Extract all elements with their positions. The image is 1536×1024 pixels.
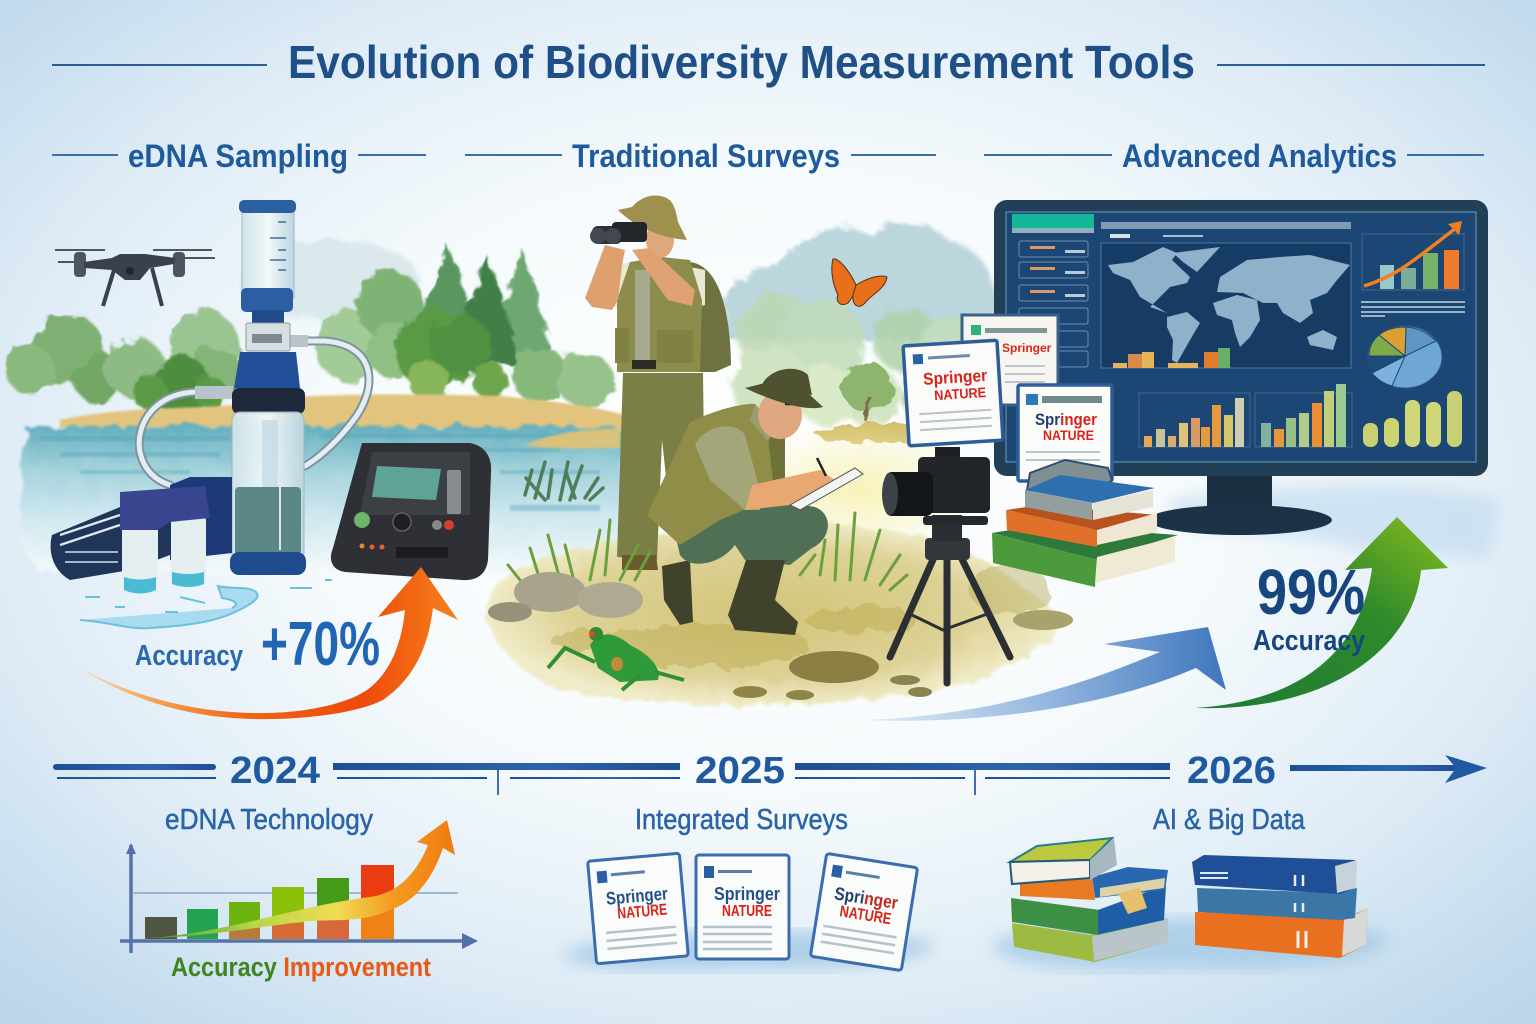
paper: Springer Nature 1: NATURE — [617, 901, 668, 923]
upper funnel — [242, 208, 294, 298]
title: Evolution of Biodiversity Measurement Tools — [288, 36, 1195, 88]
year 2025: 2025 — [695, 750, 785, 792]
label: 99% accuracy: Accuracy — [1253, 625, 1365, 657]
monitor — [994, 200, 1488, 535]
world map — [1101, 243, 1351, 368]
bar chart: accuracy improvement — [120, 820, 478, 953]
paper: front left report — [903, 340, 1003, 446]
label: eDNA Technology: eDNA Technology — [165, 804, 373, 836]
paper: Springer Nature 3 — [810, 853, 918, 971]
monitor frame — [994, 200, 1488, 476]
paper: Springer Nature 1: Springer — [605, 883, 669, 909]
arrow: green accuracy arrow — [1195, 517, 1448, 708]
right tree line — [732, 292, 980, 445]
grass tufts — [508, 513, 907, 590]
figure: crouching surveyor taking notes — [647, 369, 863, 635]
monitor stand — [1207, 474, 1272, 512]
paper: Springer Nature 2: Springer — [714, 884, 780, 904]
books: left stack — [1010, 838, 1168, 962]
glow behind surveyors — [730, 420, 990, 560]
trend chart — [1362, 221, 1464, 290]
wash under monitor — [1170, 485, 1500, 560]
sand bank — [60, 394, 625, 430]
year 2024: 2024 — [230, 750, 320, 792]
dashboard sidebar — [1012, 214, 1094, 367]
icon: camera on tripod — [882, 447, 1010, 683]
timeline — [53, 750, 1487, 795]
rocks — [488, 572, 1073, 700]
icon: butterfly — [832, 259, 887, 306]
tuft in water — [525, 462, 603, 500]
wash under Springer papers — [562, 931, 935, 970]
pie chart — [1368, 326, 1442, 388]
ground patch — [485, 520, 1056, 705]
paper: front left report: Springer — [923, 366, 988, 389]
paper: Springer Nature 3: NATURE — [838, 903, 893, 928]
heading: eDNA Sampling: eDNA Sampling — [128, 138, 348, 174]
paper: front right report: Springer — [1035, 410, 1097, 429]
arrow: blue progress arrow — [862, 627, 1226, 721]
label: accuracy +70%: Accuracy — [135, 640, 243, 672]
heading: Advanced Analytics: Advanced Analytics — [1122, 138, 1397, 174]
ground shading — [550, 565, 1050, 667]
left tree line — [6, 245, 613, 415]
icon: drone — [55, 250, 215, 306]
icon: sample tubes and case — [51, 477, 232, 594]
label: Integrated Surveys: Integrated Surveys — [635, 804, 848, 836]
year 2026: 2026 — [1187, 750, 1276, 792]
paper: back report — [962, 315, 1058, 405]
label: accuracy +70% — [135, 610, 380, 679]
label: AI & Big Data: AI & Big Data — [1153, 804, 1306, 836]
paper: Springer Nature 1 — [588, 853, 688, 964]
books: right stack — [1192, 855, 1368, 958]
label: accuracy improvement: Accuracy Improvement — [171, 952, 431, 982]
lower flask — [232, 412, 304, 562]
landscape scene — [6, 224, 1056, 705]
stack of books by monitor — [992, 460, 1178, 587]
icon: eDNA filter apparatus — [139, 200, 369, 575]
label: accuracy +70%: +70% — [261, 610, 380, 679]
filter hoses — [139, 335, 369, 485]
misty distant hills — [240, 224, 995, 340]
sand island — [525, 428, 620, 448]
paper: front left report: NATURE — [934, 384, 987, 403]
paper: Springer Nature 2: NATURE — [722, 903, 772, 920]
figure: standing surveyor with binoculars — [585, 195, 731, 570]
water streaks — [40, 434, 600, 511]
paper: Springer Nature 2 — [696, 855, 789, 959]
arrow: orange accuracy arrow — [80, 567, 458, 719]
paper: front right report — [1018, 385, 1112, 481]
paper: back report: Springer — [1002, 341, 1052, 355]
trend arrow — [145, 820, 455, 938]
icon: frog — [548, 627, 684, 690]
icon: puddle — [80, 580, 332, 628]
heading: Traditional Surveys: Traditional Surveys — [572, 138, 840, 174]
paper: front right report: NATURE — [1043, 427, 1094, 443]
dashboard top bar — [1101, 222, 1351, 238]
label: 99% accuracy: 99% — [1257, 556, 1365, 628]
lower pill bars — [1363, 391, 1462, 447]
monitor screen — [1006, 212, 1476, 462]
lake — [20, 425, 625, 575]
icon: field meter — [331, 443, 491, 580]
wash under books — [992, 918, 1390, 970]
lower bar chart two — [1255, 384, 1352, 447]
label: 99% accuracy — [1253, 556, 1365, 657]
lower bar chart one — [1139, 393, 1250, 447]
paper: Springer Nature 3: Springer — [833, 883, 899, 913]
text lines — [1361, 301, 1465, 317]
